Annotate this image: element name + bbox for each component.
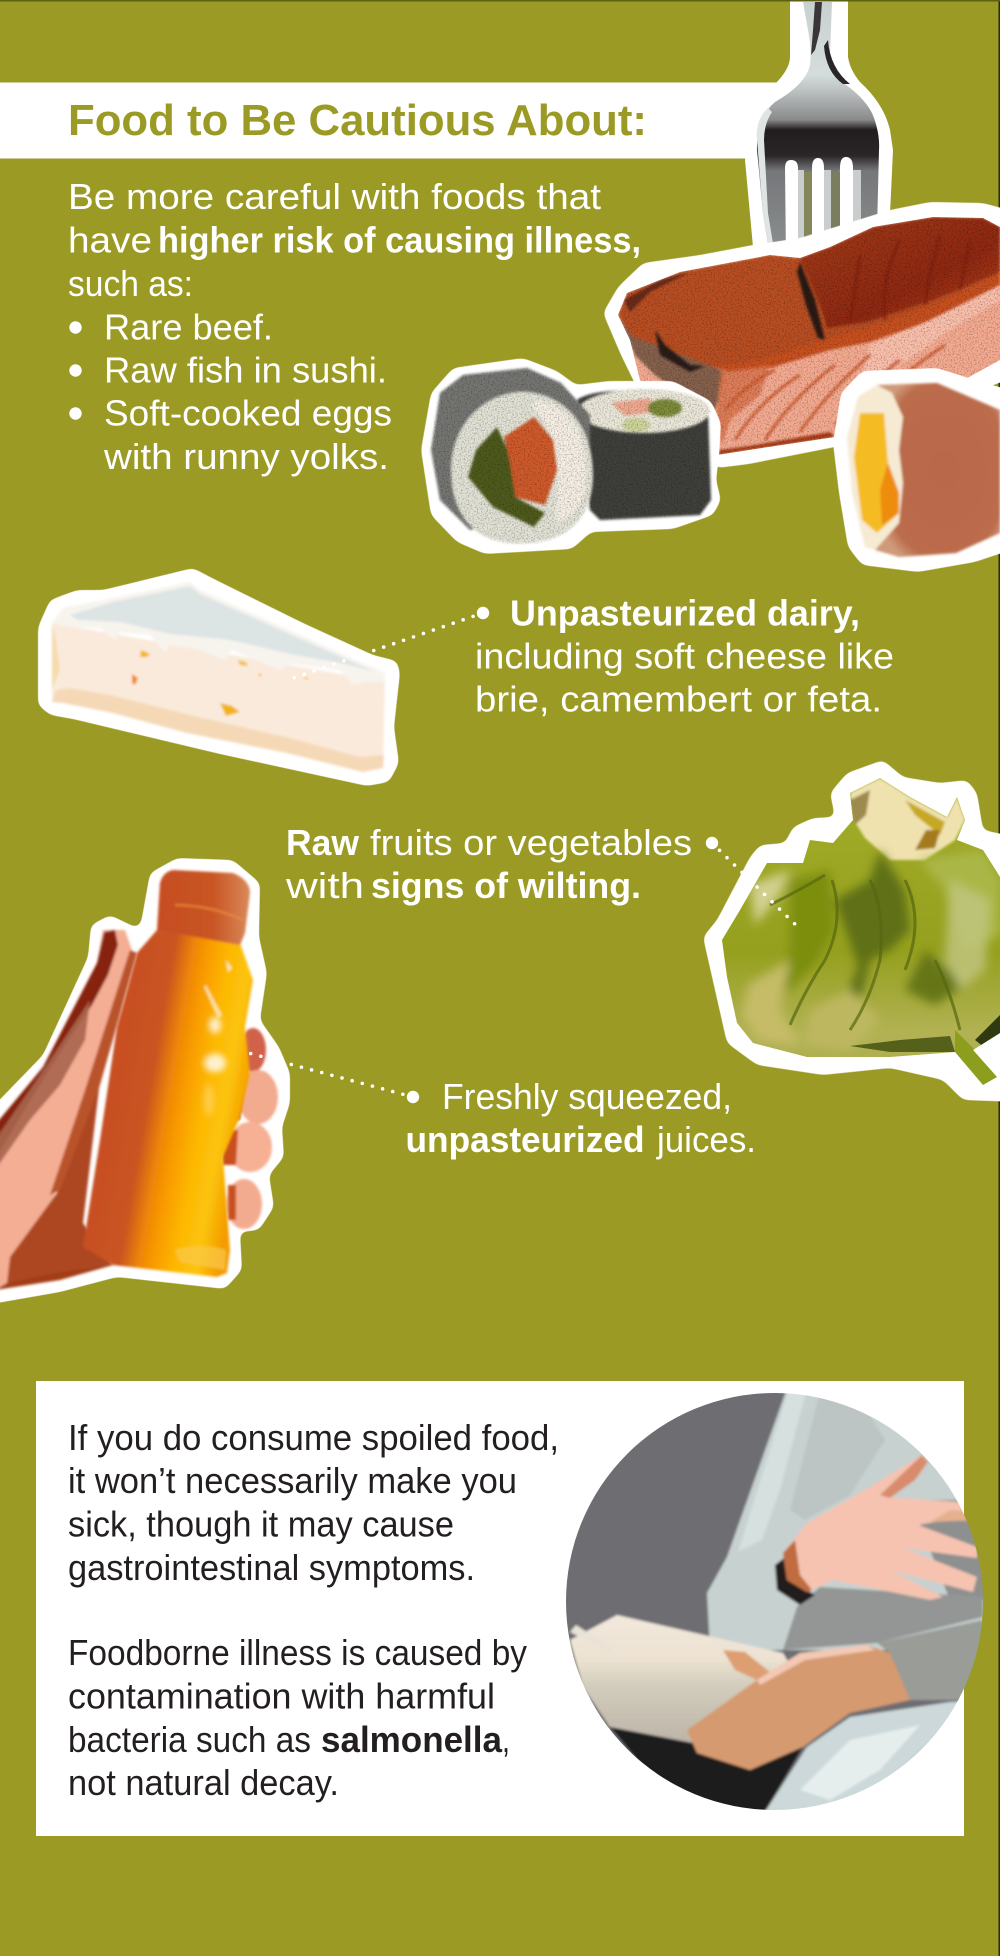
text block: foodborne illness: , [502, 1719, 510, 1760]
callout: unpasteurized dairy text: Unpasteurized dairy, [510, 592, 860, 634]
intro text block: have [68, 220, 152, 260]
text block: spoiled food: it won’t necessarily make you [68, 1460, 517, 1501]
fingers [222, 1028, 278, 1229]
icon: fork [745, 0, 893, 260]
callout: unpasteurized dairy text: brie, camembert or feta. [475, 678, 882, 720]
callout: dotted leader to cheese [285, 613, 483, 681]
text block: foodborne illness: not natural decay. [68, 1762, 339, 1803]
title: Food to Be Cautious About: [68, 96, 647, 145]
intro text block: such as: [68, 263, 193, 304]
icon: hand holding juice bottle [0, 858, 290, 1306]
callout: unpasteurized dairy text: including soft cheese like [475, 636, 894, 676]
callout: juices text: juices. [656, 1119, 756, 1160]
intro text block: higher risk of causing illness, [158, 220, 641, 260]
callout: juices text [406, 1076, 756, 1160]
callout: raw fruits text: signs of wilting. [371, 865, 641, 906]
text block: foodborne illness [68, 1632, 527, 1803]
text block: spoiled food [68, 1417, 559, 1588]
title band [0, 82, 800, 158]
callout: dotted leader to lettuce [712, 843, 802, 931]
callout: juices text: unpasteurized [406, 1119, 644, 1160]
intro text block: Soft-cooked eggs [104, 393, 392, 434]
callout: raw fruits text: with [285, 865, 364, 906]
icon: soft-cooked egg [833, 368, 1000, 572]
intro text block [68, 176, 641, 477]
icon: sushi rolls [421, 358, 721, 554]
text block: spoiled food: sick, though it may cause [68, 1504, 454, 1544]
intro text block: with runny yolks. [103, 436, 389, 477]
callout: juices text: Freshly squeezed, [442, 1076, 732, 1117]
callout: raw fruits text: Raw [286, 822, 360, 863]
juice bottle [83, 870, 253, 1277]
front roll [431, 368, 593, 544]
text block: foodborne illness: contamination with harmful [68, 1676, 495, 1716]
callout: raw fruits text [285, 822, 718, 906]
icon: brie cheese wedge [38, 568, 400, 786]
intro text block: Rare beef. [104, 306, 273, 348]
text block: foodborne illness: salmonella [321, 1719, 503, 1760]
intro text block: Be more careful with foods that [68, 176, 601, 217]
callout: raw fruits text: fruits or vegetables [370, 822, 692, 863]
icon: wilting lettuce [700, 760, 1000, 1102]
intro text block: Raw fish in sushi. [104, 350, 387, 391]
icon: rare beef [600, 200, 1000, 470]
back roll [577, 389, 711, 520]
photo: person holding stomach with food container [566, 1393, 983, 1810]
callout: unpasteurized dairy text [475, 592, 894, 720]
text block: spoiled food: If you do consume spoiled food, [68, 1417, 559, 1458]
callout: dotted leader to juice [245, 1052, 413, 1097]
text block: foodborne illness: bacteria such as [68, 1719, 311, 1760]
panel: spoiled food note [36, 1380, 1000, 1850]
text block: foodborne illness: Foodborne illness is caused by [68, 1632, 527, 1673]
text block: spoiled food: gastrointestinal symptoms. [68, 1547, 475, 1588]
